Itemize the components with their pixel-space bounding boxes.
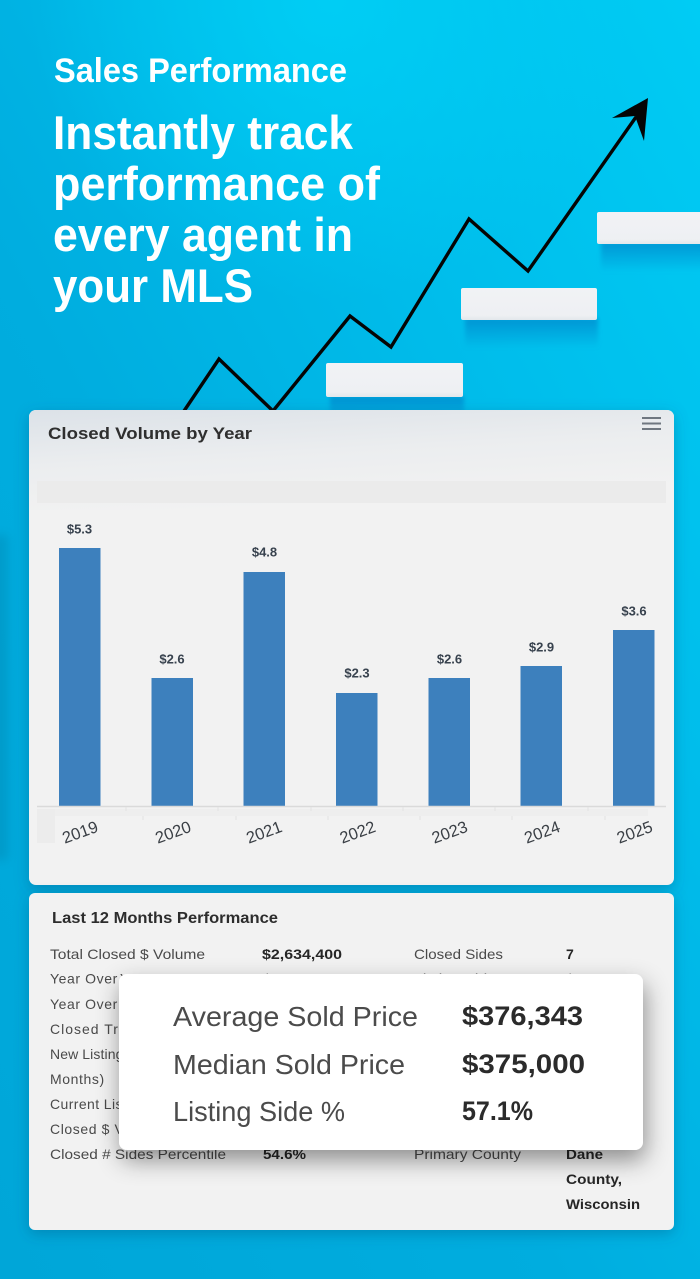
callout values: 57.1% [462,1096,533,1126]
metric values: left column: $2,322,400 [263,970,338,986]
metric values: right column [566,946,640,1212]
metric labels: left column: Closed # Sides Percentile [50,1146,226,1162]
metric labels: left column: Total Closed $ Volume [50,946,205,962]
metric labels: left column: Closed Transactions [50,1021,196,1037]
value labels [67,522,647,680]
metric labels: left column: Closed $ Volume [50,1121,165,1137]
year labels: 2023 [429,818,470,848]
value labels: $2.9 [529,640,554,654]
callout labels: Listing Side % [173,1096,345,1127]
callout labels [173,1001,418,1127]
icon: menu [642,417,661,430]
metric values: left column: $2,634,400 [262,946,342,962]
value labels: $2.3 [344,666,370,680]
value labels: $4.8 [252,544,277,560]
metric labels: right column: Listing Sides [414,970,504,986]
headline: every agent in [53,208,353,261]
panel: last 12 months performance [29,893,674,1230]
callout values: $375,000 [462,1049,585,1079]
panel: closed volume by year [29,410,674,885]
metric labels: right column: Primary County [414,1146,521,1162]
metric labels: left column: Current Listings [50,1096,154,1112]
year labels: 2022 [337,818,378,848]
metric labels: left column: Year Over [50,996,118,1012]
metric labels: left column: Year [120,970,151,986]
value labels: $2.6 [159,652,185,666]
headline: Instantly track [53,106,354,159]
metric labels: left column: Months) [50,1071,105,1087]
metric values: left column [262,946,342,1162]
callout labels: Median Sold Price [173,1049,405,1080]
panel heading: Closed Volume by Year [48,424,252,443]
callout values [462,1001,585,1126]
callout: sold price card [119,974,643,1150]
metric labels: right column [414,946,521,1162]
year labels: 2024 [522,818,563,848]
value labels: $5.3 [67,522,92,536]
panel heading: Last 12 Months Performance [52,910,278,927]
value labels: $2.6 [437,652,462,666]
year labels: 2025 [614,818,655,848]
metric labels: left column: Year Over [50,970,118,986]
white step blocks [326,212,700,424]
headline: performance of [53,157,380,210]
metric values: right column: 7 [566,946,574,962]
year labels: 2020 [153,818,194,848]
headline: your MLS [53,259,253,312]
metric values: right column: $56.2% [566,970,617,986]
metric values: left column: 54.6% [263,1146,307,1162]
metric labels: right column: Closed Sides [414,946,503,962]
bar chart [37,522,666,848]
year labels: 2019 [60,818,101,848]
year labels: 2021 [244,818,285,848]
year labels [60,818,655,848]
headline [53,106,380,312]
metric labels: left column [50,946,226,1162]
value labels: $3.6 [621,604,647,618]
callout labels: Average Sold Price [173,1001,418,1032]
metric labels: left column: New Listings (12 [50,1046,155,1062]
metric values: right column: County, [566,1171,622,1187]
rising trend arrow [184,98,648,411]
metric values: right column: Dane [566,1146,603,1162]
callout values: $376,343 [462,1001,583,1031]
metric values: right column: Wisconsin [566,1196,640,1212]
heading: Sales Performance: Sales Performance [54,52,347,90]
